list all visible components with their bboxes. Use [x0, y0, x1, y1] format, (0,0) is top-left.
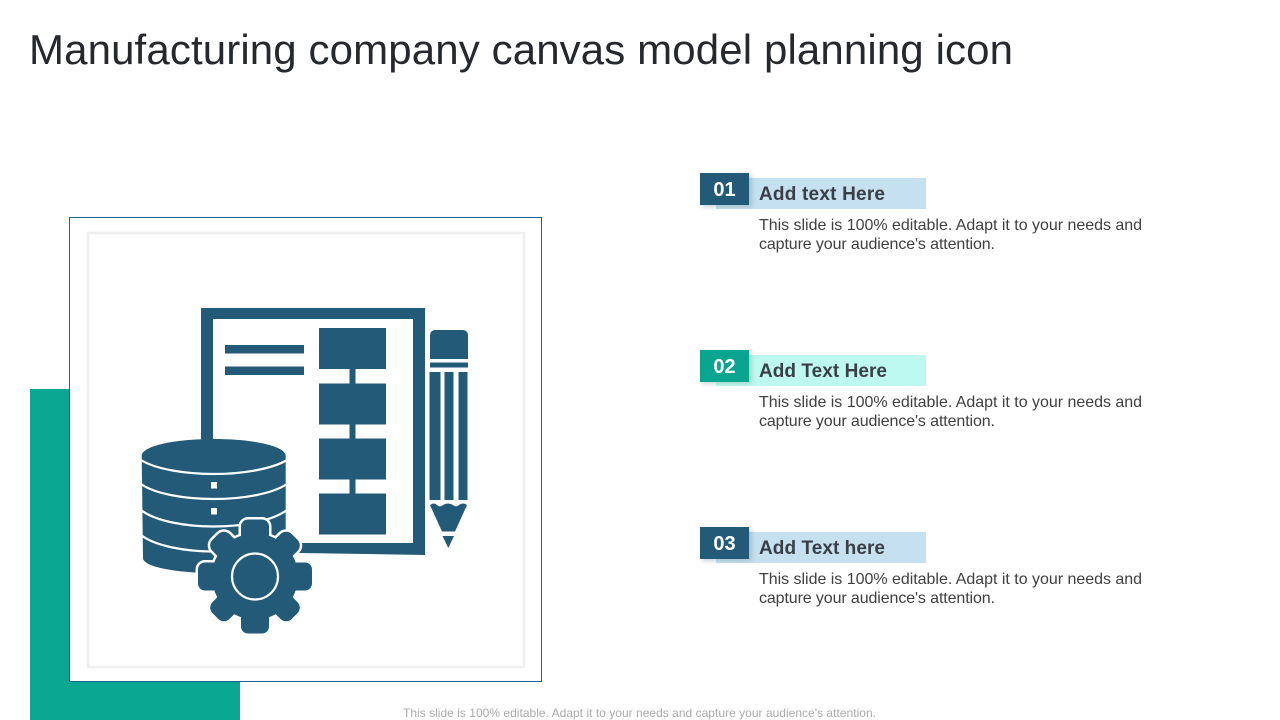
icon: document with flowchart [201, 308, 425, 555]
icon: canvas planning illustration [141, 308, 468, 634]
icon: gear [198, 520, 312, 634]
item 01 [700, 173, 1142, 253]
body text 02: This slide is 100% editable. Adapt it to your needs and [759, 394, 1142, 411]
body text 01: capture your audience's attention. [759, 236, 995, 253]
item 02 [700, 350, 1142, 430]
badge 01 [700, 173, 752, 207]
heading bar 01 [716, 178, 926, 209]
accent block: teal [30, 389, 240, 720]
footer note: This slide is 100% editable. Adapt it to your needs and capture your audience's attention. [403, 706, 876, 720]
body text 03 [759, 571, 1142, 607]
heading bar 03 [716, 532, 926, 563]
badge 02: 02 [713, 356, 736, 378]
badge 01: 01 [713, 179, 736, 201]
body text 02 [759, 394, 1142, 430]
heading 01: Add text Here [759, 184, 885, 205]
heading 02: Add Text Here [759, 361, 887, 382]
icon: database [141, 439, 287, 573]
title: Manufacturing company canvas model planning icon [29, 26, 1013, 73]
body text 03: capture your audience's attention. [759, 590, 995, 607]
badge 03: 03 [713, 533, 736, 555]
icon: pencil [430, 330, 468, 548]
body text 01 [759, 217, 1142, 253]
item 03 [700, 527, 1142, 607]
badge 03 [700, 527, 752, 561]
panel: illustration frame [70, 218, 542, 682]
heading 03: Add Text here [759, 538, 885, 559]
heading bar 02 [716, 355, 926, 386]
badge 02 [700, 350, 752, 384]
body text 01: This slide is 100% editable. Adapt it to your needs and [759, 217, 1142, 234]
body text 02: capture your audience's attention. [759, 413, 995, 430]
body text 03: This slide is 100% editable. Adapt it to your needs and [759, 571, 1142, 588]
